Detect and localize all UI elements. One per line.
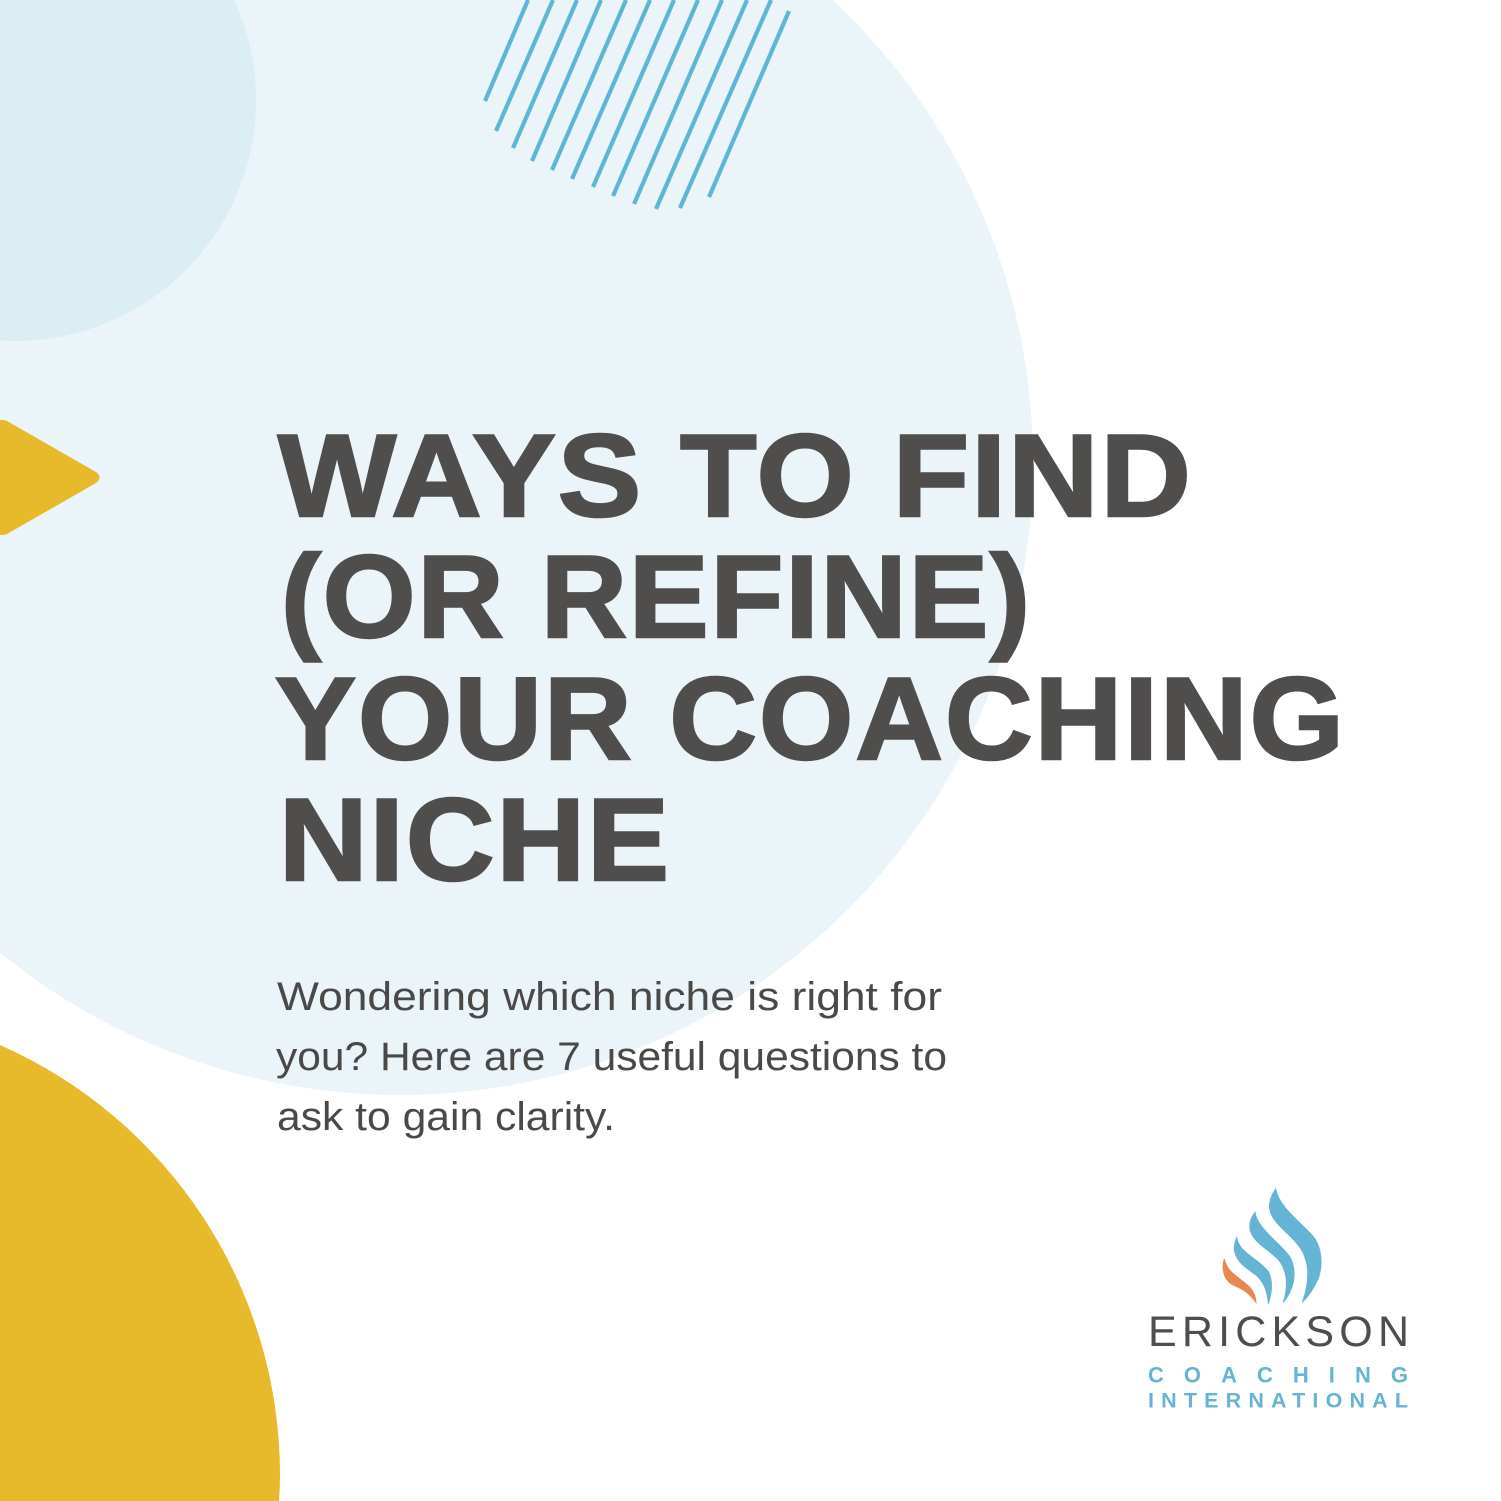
- title: (OR REFINE): [281, 531, 1032, 662]
- large yellow circle, bottom left: [0, 1045, 280, 1501]
- intro text: you? Here are 7 useful questions to: [276, 1035, 947, 1079]
- logo: Erickson Coaching International: [1148, 1189, 1409, 1412]
- small light teal circle, top left: [0, 0, 256, 341]
- yellow rounded triangle, left edge: [0, 420, 100, 535]
- intro text: ask to gain clarity.: [277, 1095, 615, 1139]
- large pale blue background circle: [0, 0, 1033, 1095]
- striped semicircle decoration: [485, 0, 789, 209]
- wordmark: Coaching: COACHING: [1148, 1362, 1408, 1388]
- wordmark: Erickson: ERICKSON: [1148, 1308, 1409, 1356]
- icon: flame: [1223, 1189, 1321, 1304]
- title: YOUR COACHING: [275, 653, 1346, 784]
- intro text: Wondering which niche is right for: [277, 975, 942, 1019]
- wordmark: International: INTERNATIONAL: [1148, 1388, 1408, 1412]
- title: [275, 410, 1346, 905]
- title: WAYS TO FIND: [278, 410, 1193, 541]
- title: NICHE: [279, 774, 671, 905]
- intro text: [276, 975, 947, 1139]
